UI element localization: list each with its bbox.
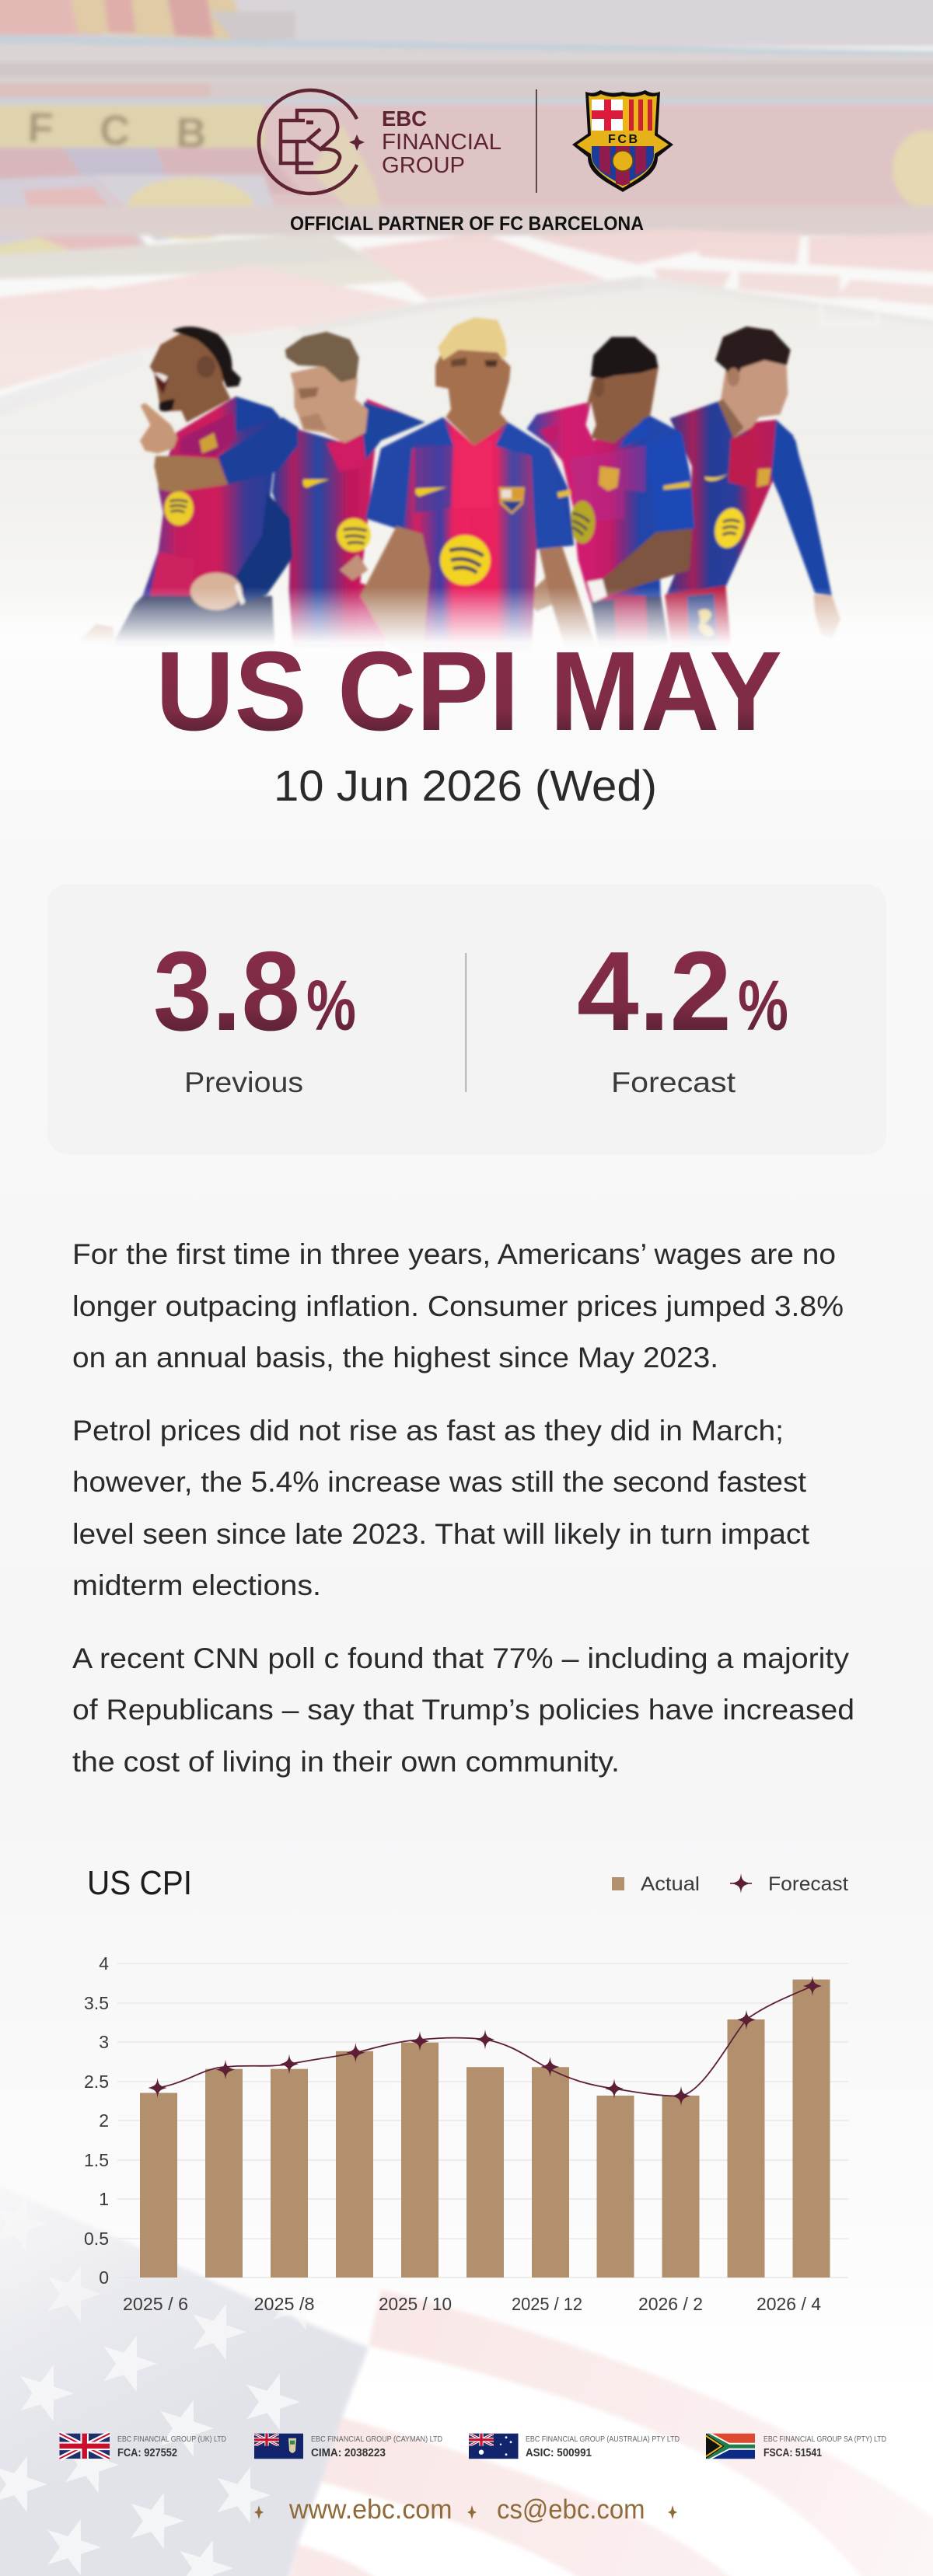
partner line: OFFICIAL PARTNER OF FC BARCELONA — [290, 213, 644, 235]
wordmark: EBC — [382, 106, 427, 131]
panel: previous and forecast — [47, 884, 886, 1154]
x axis labels: 2025 / 12 — [512, 2294, 582, 2314]
flag stripes — [288, 2289, 933, 2576]
stat: forecast — [577, 928, 788, 1098]
x axis labels — [123, 2294, 821, 2314]
body text: For the first time in three years, Americans’ wages are no — [72, 1238, 836, 1270]
x axis labels: 2026 / 2 — [638, 2294, 703, 2314]
icon: Cayman flag — [254, 2434, 303, 2459]
chart title: US CPI — [87, 1864, 192, 1902]
regulators: South Africa: FSCA: 51541 — [764, 2447, 822, 2459]
regulators: UK: FCA: 927552 — [117, 2447, 177, 2459]
title: US CPI MAY — [156, 628, 782, 754]
regulators: South Africa: EBC FINANCIAL GROUP SA (PTY) LTD — [764, 2435, 886, 2444]
wordmark: FINANCIAL — [382, 130, 501, 155]
y axis labels: 0.5 — [84, 2229, 109, 2249]
x axis labels: 2026 / 4 — [757, 2294, 821, 2314]
background: US flag — [0, 2176, 933, 2576]
x axis labels: 2025 /8 — [253, 2294, 314, 2314]
bars: actual — [140, 1980, 830, 2278]
regulators: South Africa — [706, 2434, 886, 2459]
player: second from right — [526, 337, 694, 647]
y axis labels: 3.5 — [84, 1993, 109, 2013]
logo divider — [536, 89, 537, 193]
regulators: Australia: EBC FINANCIAL GROUP (AUSTRALIA) PTY LTD — [526, 2435, 680, 2444]
players group photo — [78, 317, 840, 655]
wordmark: GROUP — [382, 153, 465, 178]
logo: FC Barcelona crest: FCB — [608, 133, 638, 146]
stat: previous: 3.8 — [153, 928, 300, 1054]
icon: South African flag — [706, 2434, 755, 2459]
body text: the cost of living in their own community. — [72, 1746, 620, 1778]
stat: forecast: 4.2 — [577, 928, 732, 1054]
stat: forecast: Forecast — [611, 1066, 736, 1098]
regulators: UK: EBC FINANCIAL GROUP (UK) LTD — [117, 2435, 226, 2444]
icon: UK flag — [59, 2434, 110, 2459]
regulators: Cayman — [254, 2434, 442, 2459]
regulators: Australia — [469, 2434, 680, 2459]
y axis labels: 1 — [99, 2189, 109, 2209]
stat: previous — [153, 928, 356, 1098]
regulators: Australia: ASIC: 500991 — [526, 2447, 592, 2459]
player: centre figure — [360, 317, 596, 655]
x axis labels: 2025 / 6 — [123, 2294, 188, 2314]
body text — [72, 1238, 854, 1778]
body text: midterm elections. — [72, 1569, 321, 1601]
icon: Australian flag — [469, 2434, 518, 2459]
stat: forecast: % — [738, 966, 788, 1045]
flag canton — [0, 2176, 369, 2576]
legend — [612, 1873, 848, 1895]
contact line — [254, 2494, 677, 2525]
icon: EBC monogram — [259, 90, 365, 194]
body text: level seen since late 2023. That will likely in turn impact — [72, 1518, 810, 1550]
player: left figure pointing — [78, 326, 280, 647]
regulators: Cayman: EBC FINANCIAL GROUP (CAYMAN) LTD — [311, 2435, 442, 2444]
y axis labels: 1.5 — [84, 2150, 109, 2170]
player: right-hand figure — [665, 326, 840, 647]
logo: EBC Financial Group — [259, 90, 501, 194]
regulators: UK — [59, 2434, 226, 2459]
wordmark — [382, 106, 501, 178]
contact line: www.ebc.com — [288, 2494, 453, 2525]
body text: A recent CNN poll c found that 77% – including a majority — [72, 1642, 850, 1674]
forecast markers — [149, 1976, 822, 2107]
logo: FC Barcelona crest — [572, 90, 673, 192]
y axis labels: 3 — [99, 2032, 109, 2052]
chart: US CPI — [84, 1864, 848, 2314]
body text: of Republicans – say that Trump’s policies have increased — [72, 1694, 854, 1726]
player: second from left — [140, 332, 425, 647]
body text: on an annual basis, the highest since May 2023. — [72, 1342, 718, 1374]
y axis labels: 2.5 — [84, 2072, 109, 2092]
background fade to white — [0, 218, 933, 466]
background: stadium photo — [0, 0, 933, 645]
body text: however, the 5.4% increase was still the second fastest — [72, 1466, 807, 1498]
stat: previous: % — [306, 966, 356, 1045]
body text: Petrol prices did not rise as fast as they did in March; — [72, 1415, 784, 1447]
x axis labels: 2025 / 10 — [379, 2294, 452, 2314]
forecast line — [158, 1986, 812, 2096]
regulators: Cayman: CIMA: 2038223 — [311, 2447, 386, 2459]
seat lettering: FCB — [27, 104, 208, 157]
date: 10 Jun 2026 (Wed) — [274, 761, 657, 810]
legend: Actual — [641, 1873, 700, 1895]
y axis labels: 0 — [99, 2267, 109, 2288]
flag stars — [0, 2187, 333, 2576]
crest on shirt — [499, 487, 525, 515]
y axis labels: 4 — [99, 1953, 109, 1974]
body text: longer outpacing inflation. Consumer prices jumped 3.8% — [72, 1290, 844, 1322]
contact line: cs@ebc.com — [497, 2494, 645, 2525]
player bottom fade — [0, 587, 933, 661]
legend: Forecast — [768, 1873, 848, 1895]
y axis labels: 2 — [99, 2110, 109, 2131]
y axis labels — [84, 1953, 109, 2288]
stat: previous: Previous — [184, 1066, 303, 1098]
